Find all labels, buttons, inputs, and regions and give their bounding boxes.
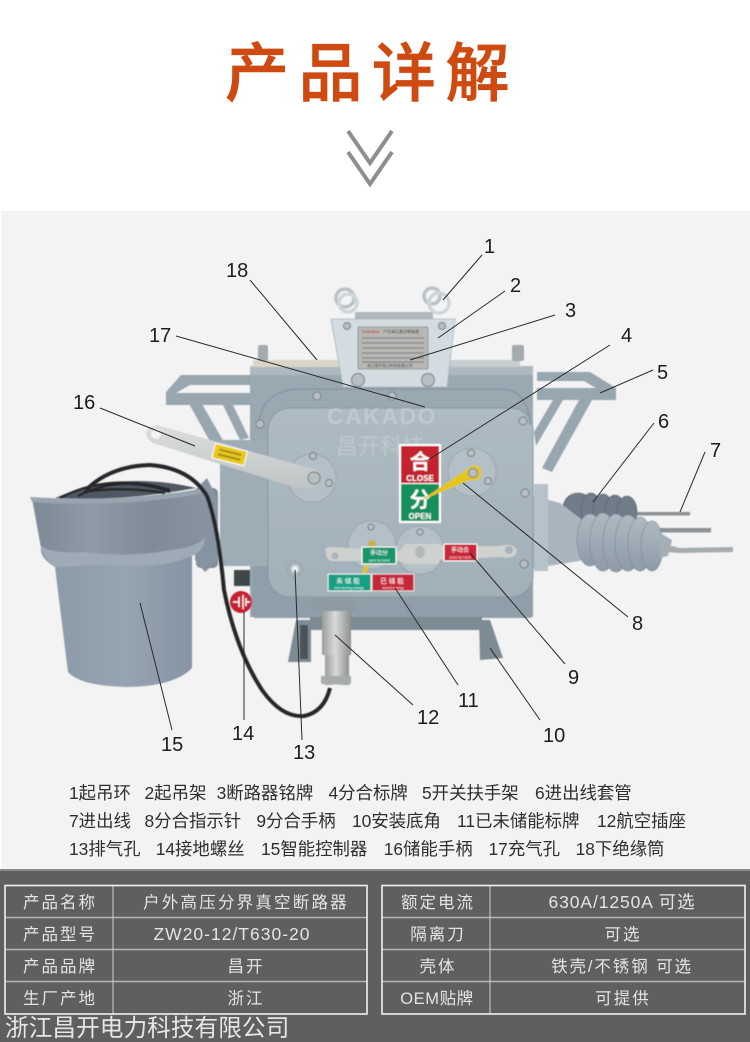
icon: close open label: OPEN [409, 512, 432, 521]
icon: control cable [86, 465, 330, 716]
icon: close open label [399, 444, 441, 523]
label: manual open: 手动分 [370, 549, 388, 557]
panel: product diagram [1, 211, 750, 869]
company name: 浙江昌开电力科技有限公司 [5, 1015, 289, 1042]
parts legend: 1起吊环 [69, 783, 131, 803]
label: manual close: 手动合 [451, 546, 469, 554]
callout 7: 7 [710, 440, 721, 462]
callout 13 [293, 570, 315, 764]
label: manual close [444, 544, 477, 561]
parts legend [69, 783, 686, 859]
table: left specifications: 生厂产地 [23, 989, 97, 1008]
callout 2 [438, 275, 521, 338]
table: right specifications: 铁壳/不锈钢 可选 [551, 957, 693, 976]
parts legend: 9分合手柄 [256, 811, 336, 831]
watermark: 昌开科技 [336, 434, 424, 459]
table: left specifications: 浙江 [228, 989, 264, 1008]
table: left specifications: 产品名称 [23, 893, 97, 912]
table: left specifications: 户外高压分界真空断路器 [143, 893, 349, 912]
watermark [327, 403, 437, 459]
table: left specifications: ZW20-12/T630-20 [153, 924, 311, 944]
callout 1 [443, 236, 495, 300]
callout 3 [410, 300, 576, 360]
callout 11: 11 [458, 690, 479, 712]
icon: double chevron down [348, 131, 392, 184]
icon: lifting bracket with nameplate [331, 312, 455, 387]
callout 9 [470, 553, 579, 689]
callout 5 [600, 362, 668, 393]
callout 15: 15 [161, 734, 183, 756]
icon: charging handle [146, 425, 332, 488]
callout 10: 10 [543, 725, 565, 747]
callout 16: 16 [73, 392, 95, 414]
table: right specifications: 可选 [604, 925, 642, 944]
table: left specifications: 昌开 [228, 957, 264, 976]
parts legend: 10安装底角 [352, 811, 441, 831]
icon: cabinet body [220, 360, 533, 630]
icon: close open label: CLOSE [406, 474, 434, 483]
callout 4 [428, 325, 632, 460]
callout 2: 2 [510, 275, 521, 297]
callout 8 [463, 483, 643, 635]
icon: discs [288, 448, 496, 574]
nameplate [358, 327, 428, 369]
cable coil [60, 483, 170, 498]
label: not stored energy [328, 574, 371, 591]
callout 3: 3 [565, 300, 576, 322]
icon: small yellow pointer [357, 565, 369, 585]
icon: top bolts [258, 345, 524, 361]
callout 6 [593, 411, 669, 502]
table: right specifications: 额定电流 [401, 893, 475, 912]
parts legend: 11已未储能标牌 [457, 811, 579, 831]
label: manual open [362, 547, 396, 564]
callout 11 [395, 588, 479, 712]
callout 18 [226, 260, 317, 360]
callout 4: 4 [621, 325, 632, 347]
title: 产品详解 [225, 38, 519, 110]
callout 5: 5 [657, 362, 668, 384]
callout 14: 14 [232, 723, 254, 745]
label: stored energy: stored energy [382, 586, 404, 590]
table: right specifications: 630A/1250A 可选 [549, 892, 695, 912]
parts legend: 8分合指示针 [144, 811, 241, 831]
callout 10 [490, 648, 565, 747]
parts legend: 15智能控制器 [261, 839, 367, 859]
warning label [212, 443, 247, 466]
table: left specifications: 产品品牌 [23, 957, 97, 976]
callout 1: 1 [484, 236, 495, 258]
parts legend: 18下绝缘筒 [576, 839, 665, 859]
callout 6: 6 [658, 411, 669, 433]
callout 9: 9 [568, 667, 579, 689]
callout 18: 18 [226, 260, 248, 282]
parts legend: 7进出线 [69, 811, 131, 831]
label: manual close: close by hand [449, 556, 471, 560]
icon: close open label: 合 [410, 451, 430, 474]
parts legend: 3断路器铭牌 [217, 783, 313, 803]
label: not stored energy: non-storing energy [334, 586, 364, 590]
callout 8: 8 [632, 613, 643, 635]
label: stored energy [372, 574, 414, 591]
icon: cabinet door [256, 389, 533, 597]
nameplate: CAKADO [362, 329, 380, 334]
callout 12 [335, 635, 439, 729]
icon: exhaust hole [288, 562, 302, 576]
icon: bucket controller [30, 478, 218, 687]
label: stored energy: 已储能 [380, 576, 406, 585]
panel: specifications [0, 869, 750, 1042]
icon: right handle frame [534, 372, 616, 472]
table: right specifications: 隔离刀 [410, 925, 466, 944]
callout 17 [149, 325, 425, 407]
icon: left handle frame [166, 375, 250, 445]
table: right specifications: 壳体 [420, 957, 456, 976]
parts legend: 17充气孔 [488, 839, 560, 859]
icon: front insulator [533, 484, 733, 572]
icon: lifting rings [336, 288, 449, 313]
nameplate: 户外高压真空断路器 [383, 328, 419, 334]
callout 17: 17 [149, 325, 171, 347]
icon: feet [288, 620, 503, 662]
table: right specifications: 可提供 [595, 989, 651, 1008]
icon: yellow pointer [420, 465, 482, 501]
callout 14 [232, 612, 254, 745]
table: left specifications [5, 885, 367, 1014]
callout numbers and leader lines [73, 236, 721, 764]
icon: ground bolt [230, 570, 252, 613]
callout 13: 13 [293, 742, 315, 764]
callout 15 [140, 603, 183, 756]
label: manual open: open by hand [368, 558, 390, 562]
icon: close open label: 分 [410, 489, 430, 512]
illustration: circuit breaker [30, 288, 733, 716]
icon: manual handle bar [325, 544, 517, 564]
nameplate: 浙江昌开电力科技有限公司 [367, 363, 413, 368]
callout 16 [73, 392, 195, 446]
parts legend: 13排气孔 [69, 839, 141, 859]
parts legend: 12航空插座 [597, 811, 686, 831]
parts legend: 16储能手柄 [384, 839, 473, 859]
parts legend: 2起吊架 [144, 783, 206, 803]
parts legend: 6进出线套管 [535, 783, 632, 803]
watermark: CAKADO [327, 403, 437, 429]
callout 12: 12 [417, 707, 439, 729]
table: left specifications: 产品型号 [23, 925, 97, 944]
icon: rear insulator [563, 493, 711, 532]
callout 7 [680, 440, 721, 512]
parts legend: 14接地螺丝 [156, 839, 245, 859]
parts legend: 4分合标牌 [328, 783, 408, 803]
label: not stored energy: 未储能 [336, 576, 362, 585]
icon: aviation connector [312, 600, 356, 685]
table: right specifications: OEM贴牌 [400, 989, 474, 1008]
table: right specifications [382, 885, 745, 1014]
parts legend: 5开关扶手架 [422, 783, 519, 803]
